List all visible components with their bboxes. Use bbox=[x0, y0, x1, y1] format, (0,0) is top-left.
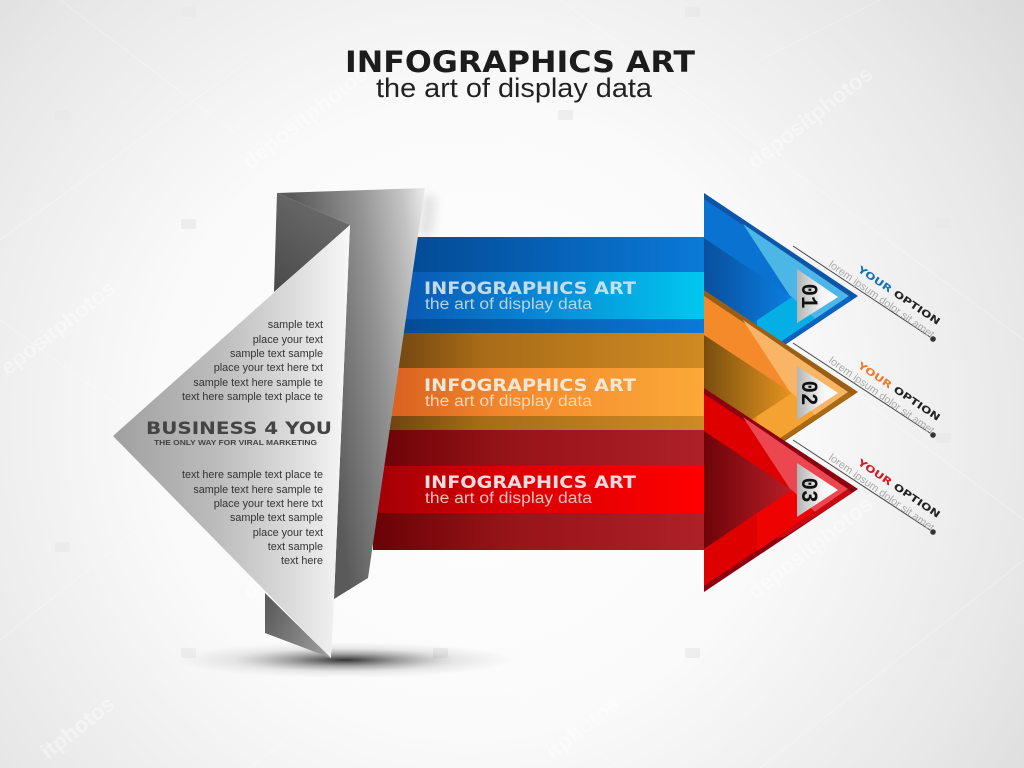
upper text block bbox=[182, 319, 323, 403]
panel: blue band bbox=[395, 237, 704, 333]
number 03: 03 bbox=[795, 478, 821, 502]
lower text block: sample text here sample te bbox=[193, 484, 323, 496]
lower text block: text here sample text place te bbox=[182, 469, 323, 481]
blue band subheading: the art of display data bbox=[425, 296, 592, 313]
watermark: depositphotos bbox=[743, 491, 877, 604]
panel: red band bbox=[373, 430, 704, 550]
callout: option 2 bbox=[793, 343, 942, 438]
upper text block: sample text sample bbox=[230, 348, 323, 360]
upper text block: sample text here sample te bbox=[193, 377, 323, 389]
lower text block: place your text bbox=[253, 527, 323, 539]
paper back band bbox=[277, 188, 425, 599]
upper text block: sample text bbox=[268, 319, 323, 331]
paper front triangle bbox=[113, 225, 350, 658]
lower text block: text sample bbox=[268, 541, 323, 553]
lower text block: sample text sample bbox=[230, 512, 323, 524]
watermark: depositphotos bbox=[493, 273, 627, 386]
lower text block: text here bbox=[281, 555, 323, 567]
paper bottom fold bbox=[265, 593, 331, 658]
number plate bbox=[797, 269, 838, 323]
watermark: depositphotos bbox=[238, 491, 372, 604]
watermark: itphotos bbox=[541, 691, 624, 764]
upper text block: place your text bbox=[253, 334, 323, 346]
number plate bbox=[797, 366, 838, 420]
callout: option 1 bbox=[793, 246, 942, 342]
watermark: depositphotos bbox=[238, 61, 372, 174]
callout: option 3: lorem ipsum dolor sit amet bbox=[826, 452, 936, 534]
panel: orange band bbox=[385, 333, 704, 430]
callout: option 1: YOUR OPTION bbox=[854, 264, 942, 328]
panel: folded paper bbox=[113, 188, 425, 658]
watermark: depositphotos bbox=[743, 61, 877, 174]
arrow: orange 02 bbox=[704, 290, 858, 495]
soft shadow of paper on background bbox=[418, 196, 436, 236]
title: INFOGRAPHICS ART bbox=[345, 45, 695, 79]
number 02: 02 bbox=[795, 380, 821, 406]
number 01: 01 bbox=[795, 284, 821, 308]
orange band subheading: the art of display data bbox=[425, 393, 592, 410]
upper text block: text here sample text place te bbox=[182, 391, 323, 403]
lower text block bbox=[182, 469, 323, 567]
number plate bbox=[797, 463, 838, 517]
upper text block: place your text here txt bbox=[214, 362, 323, 374]
callout: option 2: lorem ipsum dolor sit amet bbox=[826, 355, 936, 437]
blue band heading: INFOGRAPHICS ART bbox=[424, 279, 636, 299]
red band subheading: the art of display data bbox=[425, 490, 592, 507]
business heading: BUSINESS 4 YOU bbox=[146, 419, 332, 439]
lower text block: place your text here txt bbox=[214, 498, 323, 510]
callout: option 1: lorem ipsum dolor sit amet bbox=[826, 259, 936, 341]
red band heading: INFOGRAPHICS ART bbox=[424, 473, 636, 493]
paper ground shadow bbox=[175, 642, 515, 678]
business tagline: THE ONLY WAY FOR VIRAL MARKETING bbox=[154, 438, 317, 447]
orange band heading: INFOGRAPHICS ART bbox=[424, 376, 636, 396]
watermark: itphotos bbox=[36, 691, 119, 764]
title: the art of display data bbox=[376, 73, 652, 103]
callout: option 3 bbox=[793, 440, 942, 535]
callout: option 2: YOUR OPTION bbox=[854, 360, 942, 424]
paper top fold bbox=[274, 193, 350, 292]
arrow: blue 01 bbox=[704, 193, 858, 399]
arrow: red 03 bbox=[704, 388, 858, 592]
callout: option 3: YOUR OPTION bbox=[854, 457, 942, 521]
title bbox=[345, 45, 695, 103]
